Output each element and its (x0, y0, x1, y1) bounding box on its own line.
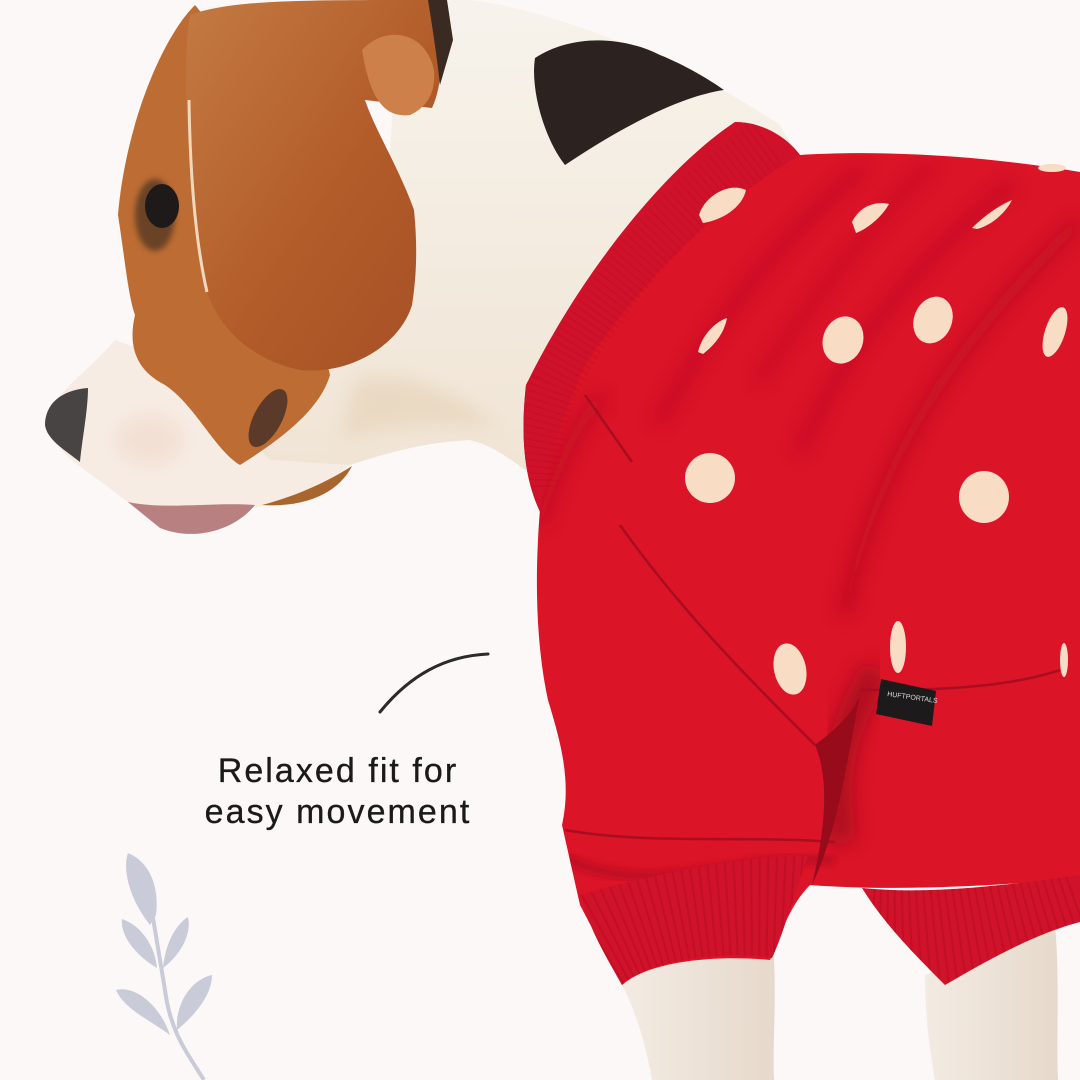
dog ear (186, 0, 453, 371)
front cuff (580, 856, 808, 985)
jowl shadow (241, 383, 295, 453)
lower jaw brown (262, 466, 352, 505)
brown cheek and forehead (118, 5, 330, 465)
seam lines (565, 395, 1060, 842)
ear pale edge (189, 100, 207, 292)
black shoulder patch (534, 40, 724, 165)
neck rib stripes (532, 143, 767, 490)
front cuff ribs (590, 903, 800, 945)
caption text: Relaxed fit for (218, 752, 458, 790)
neck fur shadow (340, 377, 500, 440)
eye (135, 179, 179, 251)
dark marking behind ear (428, 0, 453, 85)
polka dots (685, 164, 1073, 698)
fabric folds (540, 165, 1075, 876)
dog legs (622, 925, 1058, 1080)
face white muzzle (45, 340, 350, 533)
muzzle freckles (115, 414, 185, 466)
neck ribbing (524, 122, 800, 512)
mouth (128, 502, 255, 534)
curved callout line (380, 654, 488, 712)
sweater body (524, 122, 1080, 985)
rear cuff (862, 875, 1080, 985)
brand label: HUFTPORTALS (887, 691, 938, 705)
decorative leaf sprig (116, 853, 212, 1080)
armpit fold (812, 695, 860, 885)
caption text: easy movement (205, 793, 471, 831)
ear inner fold (362, 35, 434, 115)
brand label (876, 679, 938, 726)
dog white neck and body (240, 0, 800, 480)
dog head (45, 5, 352, 534)
red sweater (524, 122, 1080, 985)
rear cuff ribs (870, 900, 1080, 936)
caption text (205, 752, 471, 831)
nose (45, 388, 88, 462)
